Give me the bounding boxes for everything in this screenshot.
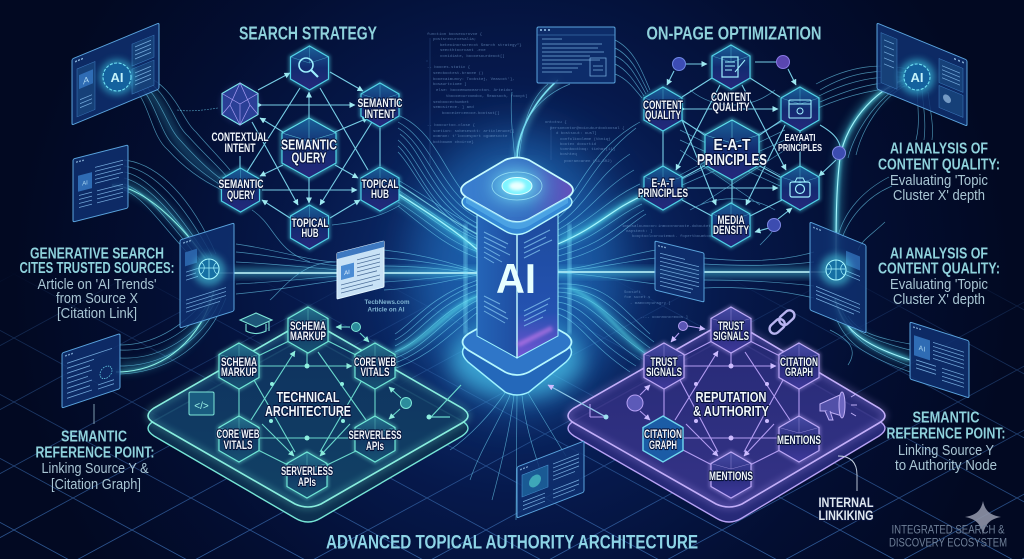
node: citation graph left — [643, 416, 683, 462]
node: EAYAATI principles: EAYAATI — [784, 133, 816, 144]
code snippets: conidiate, boocesourdeoot[] — [440, 54, 505, 59]
label: reputation and authority — [693, 390, 769, 420]
code snippets: function boosecurovce { — [427, 32, 483, 37]
node: topical hub right: TOPICAL — [362, 179, 398, 191]
code snippets — [427, 32, 716, 320]
code snippets: - mamconpuragry ] — [630, 301, 671, 306]
node: semantic query centre: QUERY — [292, 150, 327, 166]
node: topical hub bottom: TOPICAL — [292, 218, 328, 230]
node: core web vitals right — [354, 343, 396, 389]
code snippets: -- boocurtoc.close { — [427, 123, 476, 128]
node: serverless APIs bottom — [281, 452, 333, 498]
text block: generative search cites trusted sources: Article on 'AI Trends' — [38, 277, 157, 293]
node: media density: MEDIA — [718, 215, 744, 227]
node: E-A-T principles left: PRINCIPLES — [638, 188, 688, 200]
node: serverless APIs right — [348, 416, 402, 462]
node: content quality centre — [711, 92, 751, 114]
node: topical hub bottom — [290, 205, 328, 249]
code snippets: confolkooleme (tbniqj — [560, 137, 610, 142]
node: trust signals top — [711, 307, 751, 353]
node: core web vitals left: VITALS — [224, 440, 253, 452]
node: semantic intent — [358, 83, 402, 127]
panel: article window TechNews: AI — [344, 269, 350, 277]
icon: sparkle watermark — [965, 501, 1001, 535]
panel: top-left browser with AI badge: A — [83, 74, 90, 86]
node: semantic query: SEMANTIC — [218, 179, 264, 191]
code snippets: imposalounocon:inmocxnonoote.doboutet e — [622, 224, 716, 229]
text block: AI analysis of content quality lower: Evaluating 'Topic — [890, 277, 988, 293]
pillar core glow — [493, 172, 541, 200]
chart: search strategy network — [212, 46, 402, 262]
node: E-A-T principles centre: PRINCIPLES — [697, 152, 767, 169]
code snippets: d bostsout: ousT] — [556, 131, 597, 136]
panel: article window TechNews: Article on AI — [368, 306, 405, 314]
panel: right brain window — [810, 222, 866, 333]
data flow lines: right side — [450, 40, 933, 520]
node: schema markup top: SCHEMA — [290, 321, 326, 333]
code snippets: beteoinorsurecxt Search strategy"} — [440, 43, 522, 48]
small purple nodes — [627, 322, 688, 411]
chart: on-page optimization network — [638, 45, 846, 247]
node: contextual intent — [212, 132, 268, 155]
node: EAYAATI principles — [778, 133, 822, 154]
node: schema markup left — [219, 343, 259, 389]
node: core web vitals right: CORE WEB — [354, 357, 396, 369]
icon: code window: </> — [194, 401, 209, 412]
node: core web vitals right: VITALS — [360, 367, 390, 379]
node: contextual intent: INTENT — [224, 143, 256, 155]
caption: TecbNews: TecbNews.com — [364, 299, 410, 306]
node: schema markup top: MARKUP — [290, 331, 326, 343]
code snippets: botboumn choirce} — [433, 140, 474, 145]
node: serverless APIs bottom: SERVERLESS — [281, 466, 333, 478]
text block: generative search cites trusted sources: CITES TRUSTED SOURCES: — [20, 260, 174, 277]
code snippets: -- booces.static { — [427, 65, 471, 70]
code snippets: seecthtoorcant .exe — [440, 48, 486, 53]
text block: semantic reference point right: SEMANTIC — [912, 410, 980, 426]
node: schema markup left: MARKUP — [221, 367, 257, 379]
text block: generative search cites trusted sources: [Citation Link] — [57, 306, 137, 322]
node: serverless APIs bottom: APIs — [298, 477, 316, 489]
code snippets: bosaurtcioee ] — [433, 82, 467, 87]
panel: lower-left semantic window — [62, 334, 120, 408]
node: citation graph left: GRAPH — [649, 440, 677, 452]
panel: left article window — [73, 145, 128, 222]
node: mentions bottom: MENTIONS — [709, 471, 753, 483]
icon: left brain — [193, 254, 225, 286]
node: mentions right — [777, 416, 821, 462]
callout: internal linking — [818, 456, 874, 523]
icon: AI circle right: AI — [910, 70, 924, 85]
pillar cap — [462, 172, 572, 234]
text block: semantic reference point left: REFERENCE POINT: — [36, 444, 154, 462]
text block: semantic reference point right: Linking Source Y — [898, 443, 994, 459]
central glow — [190, 130, 840, 410]
label: technical architecture: ARCHITECTURE — [265, 404, 351, 420]
pillar body left face — [477, 205, 517, 358]
node: schema markup top — [288, 307, 328, 353]
icon: chain link — [768, 308, 796, 336]
node: crystal cube — [222, 83, 258, 125]
text block: generative search cites trusted sources: from Source X — [56, 291, 138, 307]
small node circles — [672, 56, 846, 232]
code snippets: oomnon: t'locoesport ogomesvcte — [433, 134, 508, 139]
label: technical architecture: TECHNICAL — [276, 390, 340, 406]
code snippets: poorancanen (51-502) — [564, 159, 612, 164]
node: trust signals top: SIGNALS — [713, 331, 749, 343]
node: citation graph right: GRAPH — [785, 367, 813, 379]
code snippets: napstect: ] — [626, 229, 652, 234]
code snippets: bootex docurtid — [560, 142, 597, 147]
node: trust signals top: TRUST — [718, 321, 744, 333]
code snippets: seoboocechumbet — [433, 100, 469, 105]
code snippets: else: boocemumcearcton. Arteidor — [436, 88, 513, 93]
text block: AI analysis of content quality top: Cluster X' depth — [893, 188, 985, 204]
panel: top-right browser with AI badge — [877, 23, 967, 126]
label: reputation and authority: REPUTATION — [696, 390, 766, 406]
node: citation graph right — [779, 343, 819, 389]
label: reputation and authority: & AUTHORITY — [693, 404, 769, 420]
code snippets: seecbootest.bracee () — [433, 71, 483, 76]
chart: reputation and authority network — [548, 307, 857, 498]
node: topical hub right: HUB — [371, 189, 389, 201]
AI label on pillar: AI — [496, 255, 536, 302]
panel: top code window — [537, 27, 615, 83]
node: content quality centre: QUALITY — [712, 102, 750, 114]
panel: middle right document — [655, 241, 704, 302]
node: trust signals left: TRUST — [650, 357, 678, 369]
node: semantic query: QUERY — [227, 190, 255, 202]
node: topical hub right — [361, 167, 399, 211]
code snippets: soetion: sobesesott: articlenuce[] — [433, 129, 515, 134]
text block: semantic reference point right — [886, 410, 1006, 474]
node: content quality centre: CONTENT — [711, 92, 751, 104]
node: E-A-T principles centre: E-A-T — [714, 137, 751, 154]
pillar body right face — [517, 205, 558, 358]
panel: top-left browser with AI badge — [72, 23, 159, 125]
node: core web vitals left — [216, 416, 260, 462]
small teal circles — [352, 322, 412, 408]
text block: semantic reference point left: Linking Source Y & — [42, 461, 149, 477]
icon: AI circle left — [99, 59, 135, 95]
node: content quality left: QUALITY — [645, 110, 681, 122]
icon: AI circle left: AI — [110, 70, 124, 85]
pillar code lines — [484, 230, 552, 326]
text block: AI analysis of content quality top: AI ANALYSIS OF — [890, 140, 988, 158]
code snippets: booptoclcoroutemot. fopertboumtoot] — [632, 234, 716, 239]
text block: AI analysis of content quality lower: AI ANALYSIS OF — [890, 246, 988, 262]
node: serverless APIs right: SERVERLESS — [348, 430, 402, 442]
code snippets: tbooceourcomdoc, Reaosoch, foocpt] — [446, 94, 528, 99]
node: core web vitals left: CORE WEB — [216, 429, 260, 441]
code snippets: semosirece. ] and — [433, 105, 474, 110]
text block: AI analysis of content quality lower — [878, 246, 1000, 308]
code snippets: ---- ooonnoncrmoos ] — [640, 315, 688, 320]
text block: generative search cites trusted sources — [20, 246, 174, 322]
connecting arrows — [663, 62, 840, 245]
title: ADVANCED TOPICAL AUTHORITY ARCHITECTURE — [326, 532, 698, 554]
pillar base — [462, 324, 572, 395]
node: semantic query — [218, 168, 264, 212]
text block: AI analysis of content quality top: Evaluating 'Topic — [890, 173, 988, 189]
node: media density — [712, 203, 750, 247]
heading: on-page optimization: ON-PAGE OPTIMIZATION — [646, 24, 822, 44]
text block: semantic reference point left: [Citation Graph] — [51, 477, 141, 493]
icon: megaphone — [820, 392, 857, 420]
panel: technical architecture platform — [148, 324, 468, 522]
code snippets: foe sucet s — [624, 295, 651, 300]
panel: lower right article window: AI — [919, 344, 925, 354]
heading: search strategy: SEARCH STRATEGY — [239, 24, 377, 44]
icon: right brain — [820, 254, 852, 286]
node: contextual intent: CONTEXTUAL — [212, 132, 268, 144]
text block: integrated search and discovery ecosystem — [889, 522, 1007, 550]
panel: article window TechNews — [337, 241, 410, 314]
panel: reputation and authority platform — [568, 324, 885, 522]
node: browser window — [781, 87, 819, 131]
code snippets: postsrecurcesalia; — [433, 37, 476, 42]
text block: semantic reference point right: to Authority Node — [895, 458, 997, 474]
panel: left article window: AI — [82, 179, 88, 188]
connecting arrows — [240, 72, 400, 262]
node: semantic query centre — [281, 118, 337, 178]
node: E-A-T principles left — [638, 166, 688, 210]
icon: code window — [189, 392, 214, 415]
node: E-A-T principles left: E-A-T — [652, 178, 674, 190]
node: camera — [781, 166, 819, 210]
label: technical architecture — [265, 390, 351, 420]
node: trust signals left — [644, 343, 684, 389]
panel: left brain window — [180, 223, 234, 328]
code snippets: personontor@noicuburdookoosal { — [550, 126, 625, 131]
code snippets: boshteq — [560, 152, 577, 157]
icon: AI circle right — [899, 59, 935, 95]
node: search magnifier — [290, 46, 328, 90]
code snippets: Soosuft — [624, 290, 641, 295]
text block: AI analysis of content quality lower: Cluster X' depth — [893, 292, 985, 308]
node: media density: DENSITY — [713, 225, 749, 237]
panel: bottom centre window — [517, 441, 584, 518]
icon: graduation cap — [240, 313, 272, 334]
text block: semantic reference point left: SEMANTIC — [61, 428, 127, 446]
connecting lines — [239, 327, 461, 465]
node: mentions right: MENTIONS — [777, 435, 821, 447]
node: citation graph right: CITATION — [780, 357, 818, 369]
node: semantic query centre: SEMANTIC — [281, 138, 337, 154]
node: semantic intent: INTENT — [364, 109, 396, 121]
node: E-A-T principles centre — [697, 120, 767, 180]
text block: AI analysis of content quality top — [878, 140, 1000, 204]
node: EAYAATI principles: PRINCIPLES — [778, 143, 822, 154]
node: schema markup left: SCHEMA — [221, 357, 257, 369]
node: content quality left — [643, 87, 683, 131]
code snippets: tonnbootboq: tinhar[11] — [560, 147, 615, 152]
data flow lines: left side — [112, 72, 480, 374]
node: semantic intent: SEMANTIC — [358, 98, 402, 110]
code snippets: booecaimuncy: Toobstej, Veasoct'], — [433, 77, 515, 82]
callout: internal linking: INTERNAL — [818, 495, 874, 510]
text block: generative search cites trusted sources: GENERATIVE SEARCH — [30, 246, 164, 262]
node: trust signals left: SIGNALS — [646, 367, 682, 379]
code snippets: booceiercenoce.bootsot[] — [442, 111, 500, 116]
panel: lower right article window — [910, 322, 969, 398]
callout: internal linking: LINKIKING — [818, 508, 874, 523]
chart: technical architecture network — [189, 307, 461, 498]
node: citation graph left: CITATION — [644, 429, 682, 441]
pillar: central AI tower — [451, 158, 583, 398]
node: topical hub bottom: HUB — [302, 228, 318, 240]
text block: semantic reference point left — [36, 404, 154, 493]
node: mentions bottom — [709, 452, 753, 498]
code snippets: ontotsu { — [545, 120, 567, 125]
node: document — [712, 45, 750, 89]
connecting lines — [548, 326, 799, 465]
node: content quality left: CONTENT — [643, 100, 683, 112]
node: serverless APIs right: APIs — [366, 441, 384, 453]
